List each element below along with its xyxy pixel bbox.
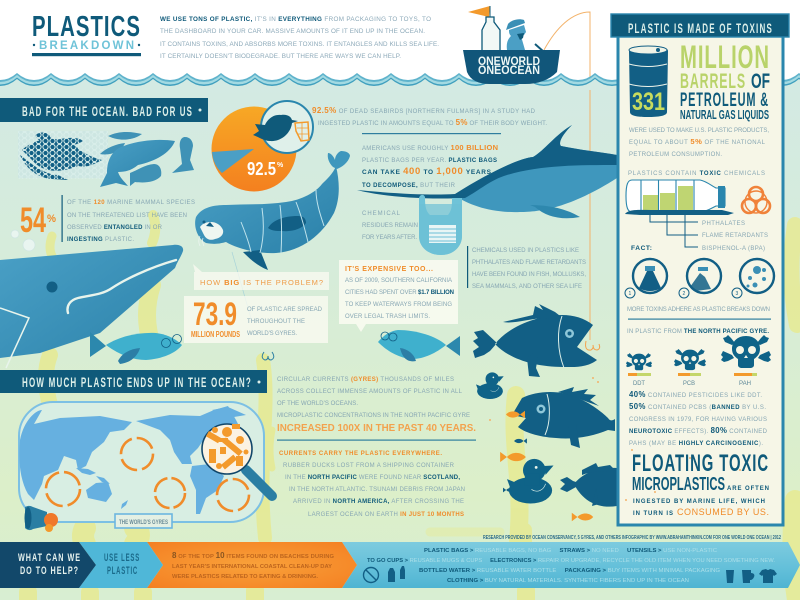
- rubber duck large: [507, 459, 554, 504]
- otter: [172, 137, 194, 173]
- banner: orange callout: WERE PLASTICS RELATED TO EATING & DRINKING.: [172, 574, 318, 580]
- icons: skulls with bars: PAH: [739, 380, 751, 387]
- callout: it's expensive: OVER LEGAL TRASH LIMITS.: [345, 314, 430, 320]
- floating plastic bits: [489, 377, 741, 501]
- intro text: WE USE TONS OF PLASTIC, IT'S IN EVERYTHING FROM PACKAGING TO TOYS, TO: [160, 16, 431, 23]
- title: [32, 11, 141, 56]
- banner: orange callout: LAST YEAR'S INTERNATIONAL COASTAL CLEAN-UP DAY: [172, 564, 332, 570]
- rubber duck small: [476, 372, 504, 399]
- stat: 73.9 million pounds: WORLD'S GYRES.: [247, 331, 297, 337]
- currents text: IN THE NORTH ATLANTIC. TSUNAMI DEBRIS FROM JAPAN: [289, 487, 465, 493]
- currents text: ARRIVED IN NORTH AMERICA, AFTER CROSSING THE: [293, 499, 464, 505]
- banner: what can we do: WHAT CAN WE: [18, 552, 81, 564]
- seaweed background: [28, 215, 797, 600]
- banner: orange callout: 8 OF THE TOP 10 ITEMS FOUND ON BEACHES DURING: [172, 551, 334, 560]
- icon: no straws: [364, 568, 378, 582]
- world map of gyres: [19, 402, 264, 522]
- 54 percent stat: [20, 195, 195, 243]
- plastic bag stat text: RESIDUES REMAIN: [362, 223, 418, 229]
- callout: it's expensive: IT'S EXPENSIVE TOO...: [345, 266, 433, 273]
- pie chart 92.5%: [212, 106, 296, 192]
- section heading: how much plastic: HOW MUCH PLASTIC ENDS UP IN THE OCEAN?: [22, 375, 252, 390]
- gyres text: INCREASED 100X IN THE PAST 40 YEARS.: [277, 423, 476, 434]
- blue whale: [100, 140, 175, 187]
- callout: floating toxic microplastics: [632, 450, 769, 517]
- seal: [130, 164, 161, 186]
- panel heading: bad for the ocean: [0, 98, 208, 122]
- stat: 73.9 million pounds: OF PLASTIC ARE SPREAD: [247, 307, 323, 313]
- section heading: how much plastic: [0, 370, 267, 393]
- icon: pipe spilling plastic: [24, 506, 58, 532]
- callout: floating toxic microplastics: MICROPLASTICS: [632, 474, 725, 494]
- fish behind panel: [560, 463, 617, 507]
- tips text: CLOTHING > BUY NATURAL MATERIALS. SYNTHETIC FIBERS END UP IN THE OCEAN: [447, 578, 689, 584]
- plastic bag stat text: CAN TAKE 400 TO 1,000 YEARS: [362, 166, 492, 177]
- hungry fish: [512, 387, 615, 448]
- fact diagram: plastic breaking down: 1: [628, 291, 632, 297]
- icon: hook: [262, 352, 274, 360]
- chemicals legend: BISPHENOL-A (BPA): [702, 246, 765, 252]
- toxin stats text: CONGRESS IN 1979, FOR HAVING VARIOUS: [629, 417, 767, 423]
- chemicals text: CHEMICALS USED IN PLASTICS LIKE: [472, 248, 579, 254]
- chemicals text: HAVE BEEN FOUND IN FISH, MOLLUSKS,: [472, 272, 586, 278]
- banner: orange callout: [147, 542, 357, 588]
- chemicals text: SEA MAMMALS, AND OTHER SEA LIFE: [472, 284, 582, 290]
- icon: bottle: [388, 566, 405, 582]
- panel heading: bad for the ocean: BAD FOR THE OCEAN. BAD FOR US: [22, 103, 193, 119]
- small dark fish: [503, 488, 515, 492]
- pie chart 92.5%: %: [277, 162, 284, 169]
- shark: [357, 125, 617, 218]
- fish with glasses: [90, 332, 182, 364]
- icons: skulls with bars: [626, 335, 771, 387]
- callout: how big is the problem: [193, 264, 329, 290]
- stat: 73.9 million pounds: MILLION POUNDS: [191, 330, 240, 339]
- callout: floating toxic microplastics: IN TURN IS: [633, 511, 673, 517]
- small blue fishes: [100, 132, 142, 154]
- big whale: [0, 245, 183, 370]
- icon: bird eating plastic: [253, 101, 313, 153]
- waves: [0, 70, 800, 90]
- chemicals legend: FLAME RETARDANTS: [702, 233, 768, 239]
- plastic bag stat text: TO DECOMPOSE, BUT THEIR: [362, 183, 456, 189]
- currents text: CURRENTS CARRY THE PLASTIC EVERYWHERE.: [279, 451, 442, 457]
- plastic bag stat text: FOR YEARS AFTER.: [362, 235, 417, 241]
- gyres text: OF THE WORLD'S OCEANS.: [277, 401, 358, 407]
- fish with glasses, facing left: [378, 330, 460, 361]
- fishing line: [544, 12, 590, 340]
- callout: it's expensive: [339, 260, 458, 332]
- barrels text: PLASTICS CONTAIN TOXIC CHEMICALS: [628, 171, 765, 177]
- plastic bag stat text: CHEMICAL: [362, 211, 401, 217]
- fact diagram: plastic breaking down: 3: [736, 291, 738, 297]
- barrels text: EQUAL TO ABOUT 5% OF THE NATIONAL: [629, 137, 766, 146]
- currents text: IN THE NORTH PACIFIC WERE FOUND NEAR SCOTLAND,: [285, 475, 460, 481]
- label: the world's gyres: THE WORLD'S GYRES: [119, 520, 168, 526]
- small orange fish: [506, 411, 525, 418]
- seabird text: [312, 106, 547, 127]
- heading: 331 million barrels: [680, 39, 770, 122]
- icon: oil barrel with 331: 331: [632, 88, 665, 116]
- chemicals text: PHTHALATES AND FLAME RETARDANTS: [472, 260, 586, 266]
- intro text: [160, 16, 439, 60]
- plastic bag stat text: [362, 143, 498, 241]
- logo: boat and fisherman: ONEOCEAN: [478, 63, 540, 77]
- stat: 73.9 million pounds: [184, 296, 328, 343]
- chemicals legend: PHTHALATES: [702, 221, 745, 227]
- barrels text: PETROLEUM CONSUMPTION.: [629, 152, 722, 158]
- intro text: THE DASHBOARD IN YOUR CAR. MASSIVE AMOUNTS OF IT END UP IN THE OCEAN.: [160, 28, 425, 35]
- barrels text: WERE USED TO MAKE U.S. PLASTIC PRODUCTS,: [629, 128, 769, 134]
- panel: plastic is made of toxins: [618, 34, 783, 525]
- 54 percent stat: INGESTING PLASTIC.: [67, 237, 134, 243]
- tips text: PLASTIC BAGS > REUSABLE BAGS, NO BAG STRAWS > NO NEED UTENSILS > USE NON-PLASTIC: [424, 548, 717, 554]
- callout: it's expensive: AS OF 2009, SOUTHERN CALIFORNIA: [345, 278, 452, 284]
- plastic bag icon: [419, 195, 462, 255]
- seabird text: 92.5% OF DEAD SEABIRDS [NORTHERN FULMARS] IN A STUDY HAD: [312, 106, 536, 115]
- toxin stats text: 50% CONTAINED PCBS (BANNED BY U.S.: [629, 402, 766, 411]
- fact caption: MORE TOXINS ADHERE AS PLASTIC BREAKS DOWN: [627, 307, 770, 313]
- callout: floating toxic microplastics: CONSUMED BY US.: [677, 507, 769, 517]
- plastic bag stat text: PLASTIC BAGS PER YEAR. PLASTIC BAGS: [362, 158, 497, 164]
- 54 percent stat: %: [47, 213, 56, 225]
- fact diagram: plastic breaking down: [625, 259, 774, 298]
- big fish with hook: [473, 304, 600, 377]
- icon: oil barrel with 331: [629, 46, 668, 117]
- stat: 73.9 million pounds: 73.9: [193, 296, 237, 332]
- net with entangled animals: [18, 131, 108, 180]
- fact label: FACT:: [631, 245, 652, 252]
- currents text: [279, 451, 465, 518]
- panel heading: toxins: [611, 14, 789, 37]
- callout: floating toxic microplastics: ARE OFTEN: [727, 486, 769, 492]
- toxin stats text: PAHS (MAY BE HIGHLY CARCINOGENIC).: [629, 441, 763, 447]
- icons: skulls with bars: DDT: [633, 380, 645, 387]
- orange fish: [500, 452, 526, 462]
- banner: what can we do: DO TO HELP?: [20, 565, 79, 577]
- chemicals legend: [650, 212, 768, 252]
- tips text: BOTTLED WATER > REUSABLE WATER BOTTLE PACKAGING > BUY ITEMS WITH MINIMAL PACKAGING: [419, 568, 720, 574]
- intro text: IT CONTAINS TOXINS, AND ABSORBS MORE TOXINS. IT ENTANGLES AND KILLS SEA LIFE.: [160, 41, 439, 48]
- logo: boat and fisherman: [463, 6, 560, 84]
- plastic bag stat text: AMERICANS USE ROUGHLY 100 BILLION: [362, 143, 498, 152]
- icon: biohazard: [742, 187, 770, 213]
- fact diagram: plastic breaking down: 2: [682, 291, 686, 297]
- magnifying glass: [202, 424, 272, 496]
- callout: it's expensive: CITIES HAD SPENT OVER $1.7 BILLION: [345, 290, 454, 296]
- seal tangled in plastic: [195, 151, 350, 322]
- gyres text: [277, 377, 476, 434]
- orange fish bottom: [572, 513, 593, 521]
- 54 percent stat: OBSERVED ENTANGLED IN OR: [67, 225, 163, 231]
- banner: use less plastic: [79, 542, 163, 588]
- gyres text: MICROPLASTIC CONCENTRATIONS IN THE NORTH PACIFIC GYRE: [277, 413, 470, 419]
- heading: 331 million barrels: OF: [751, 70, 770, 93]
- currents text: RUBBER DUCKS LOST FROM A SHIPPING CONTAINER: [283, 463, 455, 469]
- 54 percent stat: OF THE 120 MARINE MAMMAL SPECIES: [67, 200, 195, 206]
- logo: boat and fisherman: ONEWORLD: [478, 54, 540, 68]
- banner: tips strip: [342, 542, 800, 588]
- callout: it's expensive: TO KEEP WATERWAYS FROM BEING: [345, 302, 452, 308]
- callout: floating toxic microplastics: INGESTED BY MARINE LIFE, WHICH: [633, 499, 765, 505]
- stat: 73.9 million pounds: THROUGHOUT THE: [247, 319, 305, 325]
- callout: how big is the problem: HOW BIG IS THE PROBLEM?: [200, 278, 323, 287]
- label: the world's gyres: [115, 514, 172, 528]
- bubbles: [11, 230, 35, 251]
- intro text: IT CERTAINLY DOESN'T BIODEGRADE. BUT THERE ARE WAYS WE CAN HELP.: [160, 53, 401, 60]
- icons: skulls with bars: PCB: [683, 380, 695, 387]
- heading: 331 million barrels: BARRELS: [680, 70, 746, 93]
- seabird text: INGESTED PLASTIC IN AMOUNTS EQUAL TO 5% OF THEIR BODY WEIGHT.: [318, 118, 547, 127]
- banner: what can we do: [0, 542, 96, 588]
- gyres text: CIRCULAR CURRENTS (GYRES) THOUSANDS OF MILES: [277, 377, 454, 383]
- icons: cups and shirt: [726, 569, 777, 583]
- 54 percent stat: 54: [20, 201, 46, 240]
- title: BREAKDOWN: [39, 40, 134, 52]
- tips text: [367, 548, 775, 584]
- icon: bottle of chemicals: [625, 180, 734, 215]
- north pacific gyre label: IN PLASTIC FROM THE NORTH PACIFIC GYRE.: [627, 329, 769, 335]
- 54 percent stat: ON THE THREATENED LIST HAVE BEEN: [67, 213, 187, 219]
- chemicals text: [467, 246, 586, 290]
- currents text: LARGEST OCEAN ON EARTH IN JUST 10 MONTHS: [308, 512, 464, 518]
- toxin stats text: [629, 390, 768, 447]
- small dark fish: [514, 438, 527, 444]
- banner: use less plastic: PLASTIC: [107, 565, 138, 577]
- banner: use less plastic: USE LESS: [104, 552, 140, 564]
- tips text: TO GO CUPS > REUSABLE MUGS & CUPS ELECTRONICS > REPAIR OR UPGRADE, RECYCLE THE OLD ITEM WHEN YOU NEED SOMETHING NEW.: [367, 558, 775, 564]
- barrels text: [628, 128, 769, 177]
- title: PLASTICS: [32, 11, 141, 43]
- toxin stats text: NEUROTOXIC EFFECTS). 80% CONTAINED: [629, 426, 768, 435]
- pie chart 92.5%: 92.5: [247, 158, 276, 179]
- toxin stats text: 40% CONTAINED PESTICIDES LIKE DDT.: [629, 390, 762, 399]
- gyres text: ACROSS COLLECT IMMENSE AMOUNTS OF PLASTIC IN ALL: [277, 389, 463, 395]
